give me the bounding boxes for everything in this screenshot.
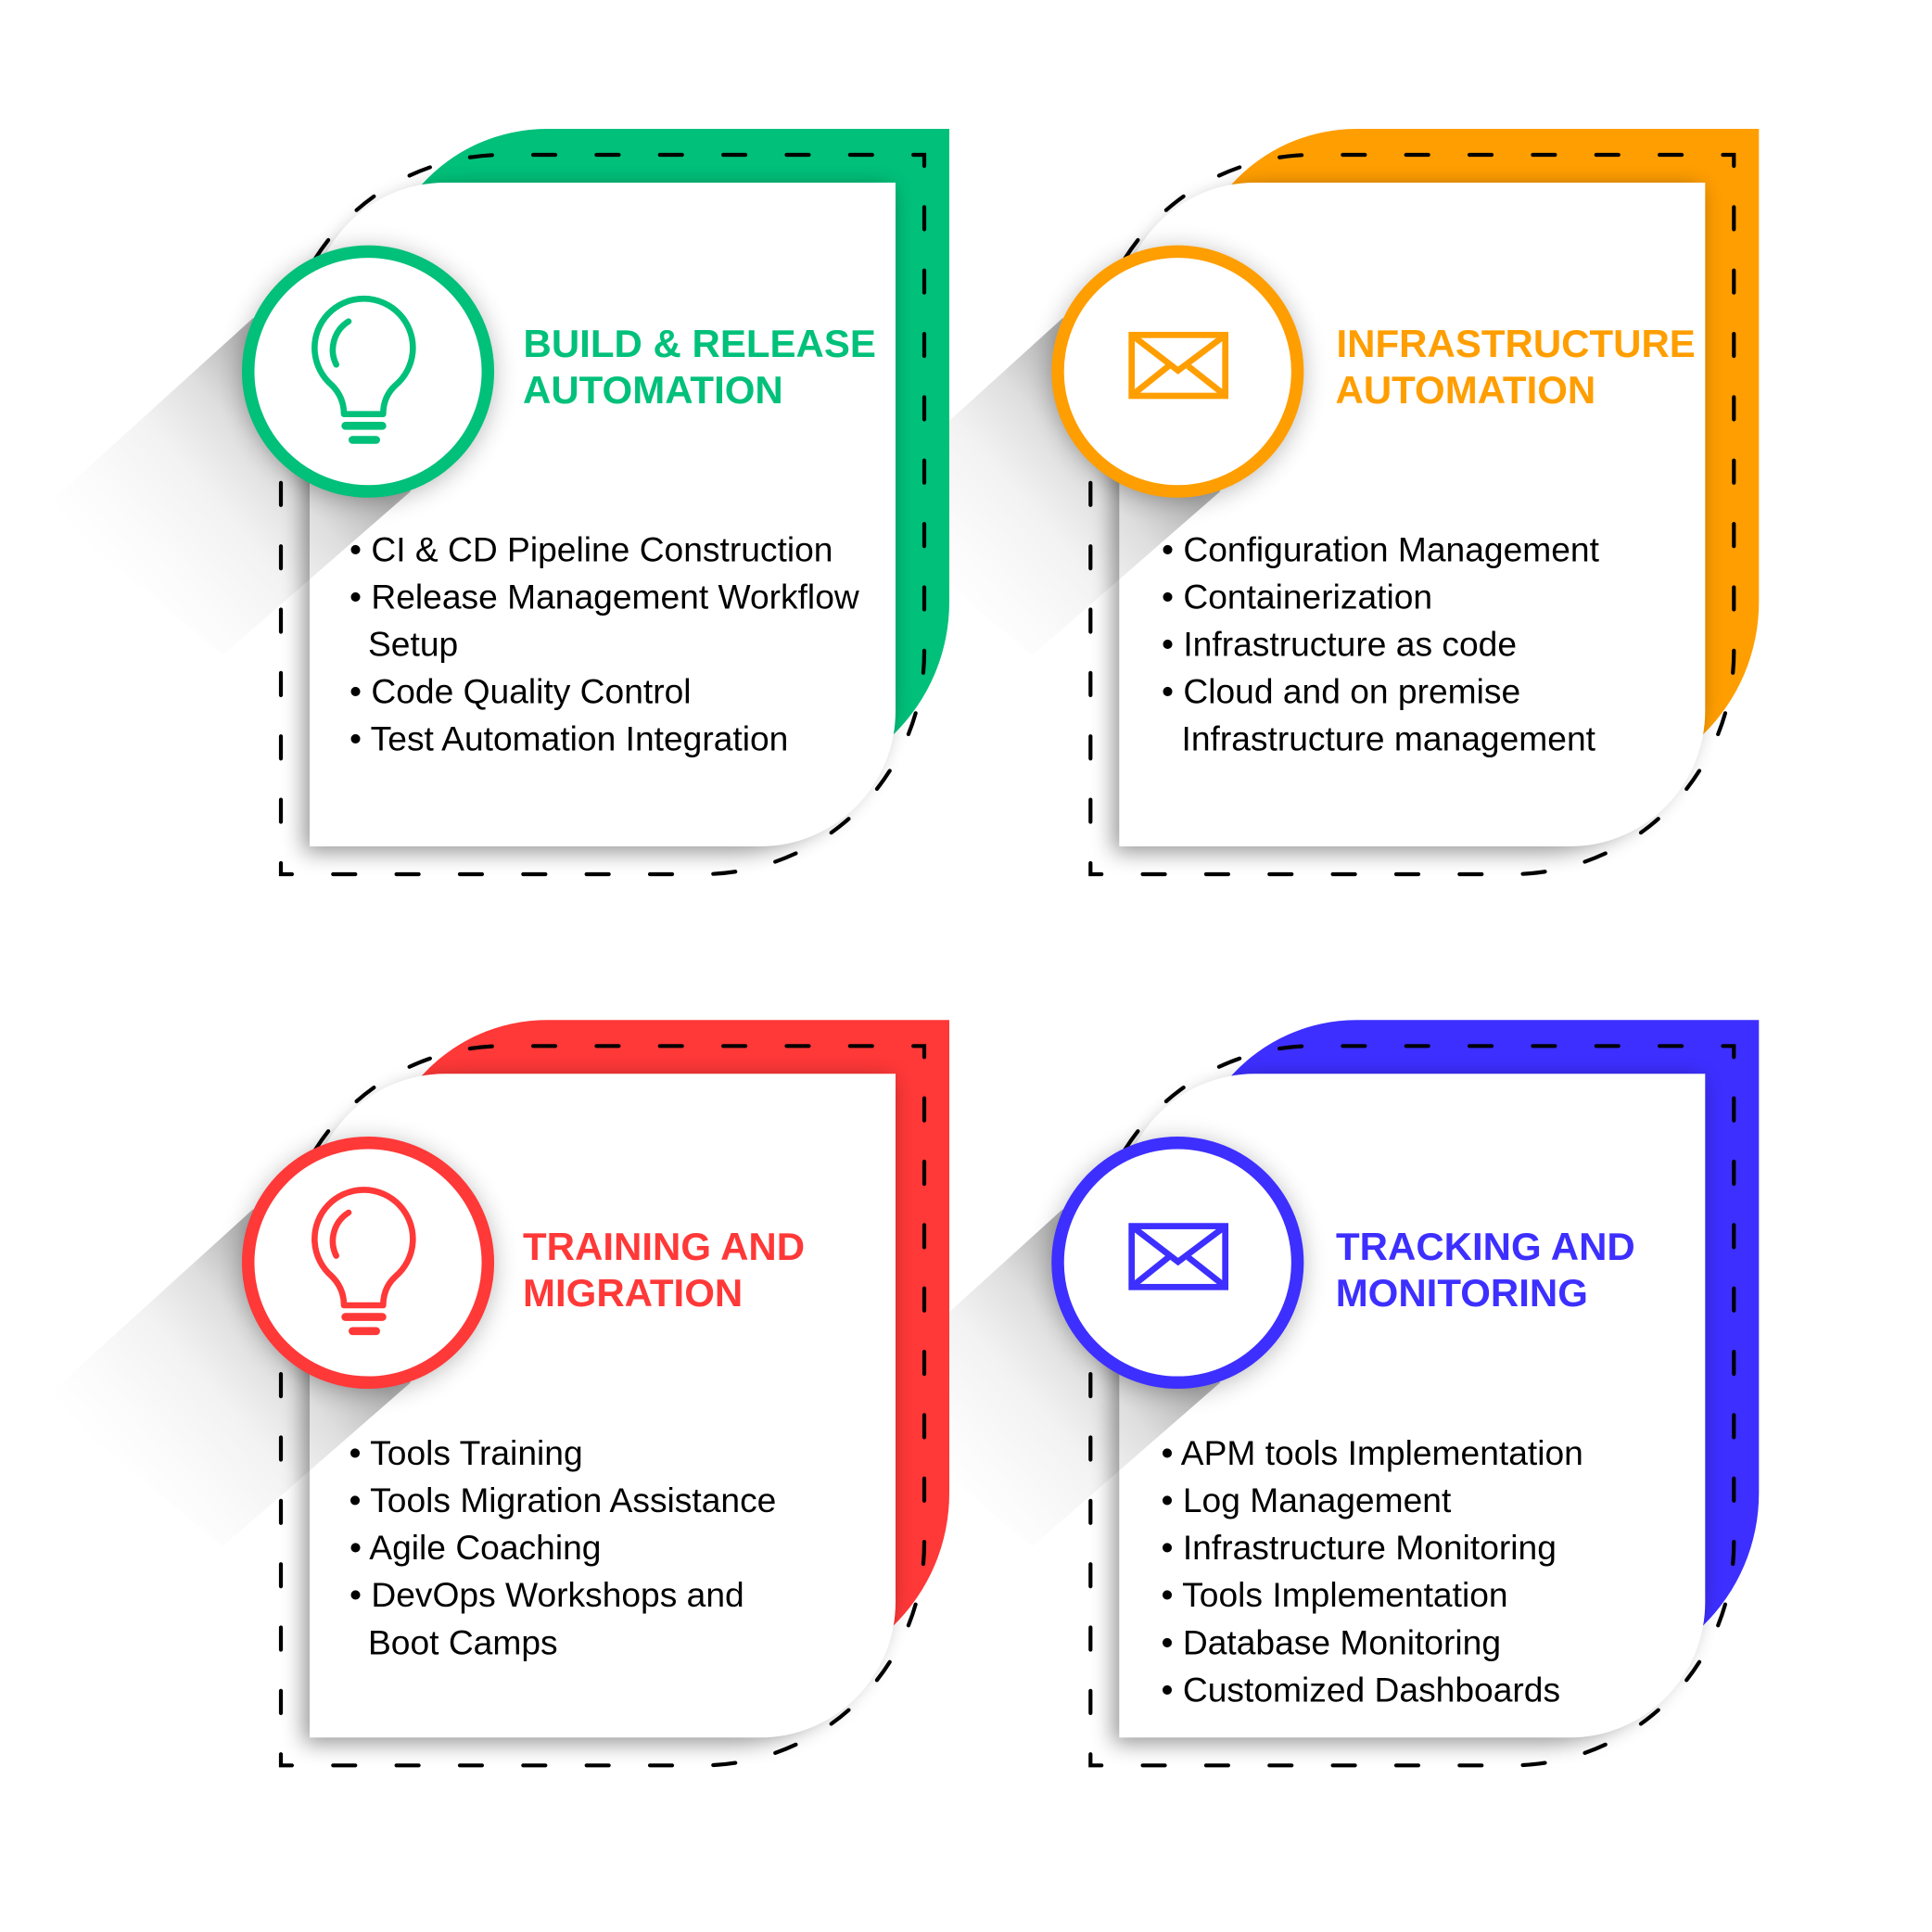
list: infrastructure items: Infrastructure management xyxy=(1181,718,1596,757)
dashed outline xyxy=(281,155,924,874)
list: build and release items: • Release Management Workflow xyxy=(350,577,859,616)
panel accent frame xyxy=(1231,1020,1759,1626)
list: tracking items: • Infrastructure Monitoring xyxy=(1161,1528,1557,1567)
icon badge xyxy=(248,251,488,491)
long shadow of icon badge xyxy=(44,318,411,655)
panel shadow xyxy=(304,188,890,852)
long shadow of icon badge xyxy=(854,1209,1220,1546)
badge shadow xyxy=(1053,1141,1302,1390)
dashed outline xyxy=(1090,1046,1734,1765)
heading: tracking and monitoring: MONITORING xyxy=(1336,1271,1588,1315)
panel: tracking and monitoring xyxy=(854,1020,1759,1765)
list: infrastructure items: • Configuration Management xyxy=(1162,529,1600,568)
panel: infrastructure automation xyxy=(854,129,1759,874)
list: infrastructure items: • Containerization xyxy=(1162,577,1432,616)
list: training items: Boot Camps xyxy=(368,1622,558,1661)
heading: tracking and monitoring: TRACKING AND xyxy=(1336,1225,1635,1268)
icon badge xyxy=(248,1143,488,1382)
list: build and release items: Setup xyxy=(368,624,458,663)
panel card xyxy=(1119,1074,1705,1737)
heading: training and migration: MIGRATION xyxy=(523,1271,743,1315)
heading: training and migration: TRAINING AND xyxy=(523,1225,805,1268)
badge shadow xyxy=(244,250,492,499)
list: training items: • Tools Migration Assistance xyxy=(349,1481,776,1519)
panel card xyxy=(310,1074,896,1737)
dashed outline xyxy=(281,1046,924,1765)
list: tracking items: • Customized Dashboards xyxy=(1161,1670,1560,1709)
heading: infrastructure automation: INFRASTRUCTURE xyxy=(1337,322,1696,365)
icon badge xyxy=(1058,1143,1298,1382)
long shadow of icon badge xyxy=(854,318,1220,655)
panel card xyxy=(1119,183,1705,846)
panel shadow xyxy=(1113,188,1699,852)
icon badge xyxy=(1058,251,1298,491)
panel: build and release automation xyxy=(44,129,949,874)
list: training items: • Agile Coaching xyxy=(350,1528,601,1567)
icon: envelope xyxy=(1131,1226,1226,1287)
panel accent frame xyxy=(1231,129,1759,735)
list: training items: • DevOps Workshops and xyxy=(350,1575,744,1614)
dashed outline xyxy=(1090,155,1734,874)
icon: light bulb xyxy=(314,299,413,439)
list: infrastructure items: • Infrastructure as code xyxy=(1162,624,1517,663)
list: tracking items: • Database Monitoring xyxy=(1161,1622,1501,1661)
list: infrastructure items: • Cloud and on premise xyxy=(1162,671,1520,710)
panel accent frame xyxy=(422,1020,949,1626)
list: build and release items: • Code Quality Control xyxy=(350,671,692,710)
list: build and release items: • Test Automation Integration xyxy=(350,718,788,757)
badge shadow xyxy=(244,1141,492,1390)
heading: build and release automation: BUILD & RELEASE xyxy=(523,322,876,365)
list: tracking items: • Tools Implementation xyxy=(1161,1575,1508,1614)
list: tracking items: • APM tools Implementation xyxy=(1161,1433,1583,1472)
heading: infrastructure automation: AUTOMATION xyxy=(1335,368,1595,412)
badge shadow xyxy=(1053,250,1302,499)
panel accent frame xyxy=(422,129,949,735)
icon: light bulb xyxy=(314,1189,413,1331)
list: build and release items: • CI & CD Pipeline Construction xyxy=(350,529,833,568)
panel shadow xyxy=(304,1079,890,1743)
list: tracking items: • Log Management xyxy=(1161,1481,1452,1519)
panel: training and migration xyxy=(44,1020,949,1765)
panel shadow xyxy=(1113,1079,1699,1743)
panel card xyxy=(310,183,896,846)
icon: envelope xyxy=(1131,335,1226,396)
heading: build and release automation: AUTOMATION xyxy=(523,368,783,412)
list: training items: • Tools Training xyxy=(349,1433,583,1472)
long shadow of icon badge xyxy=(44,1209,411,1546)
